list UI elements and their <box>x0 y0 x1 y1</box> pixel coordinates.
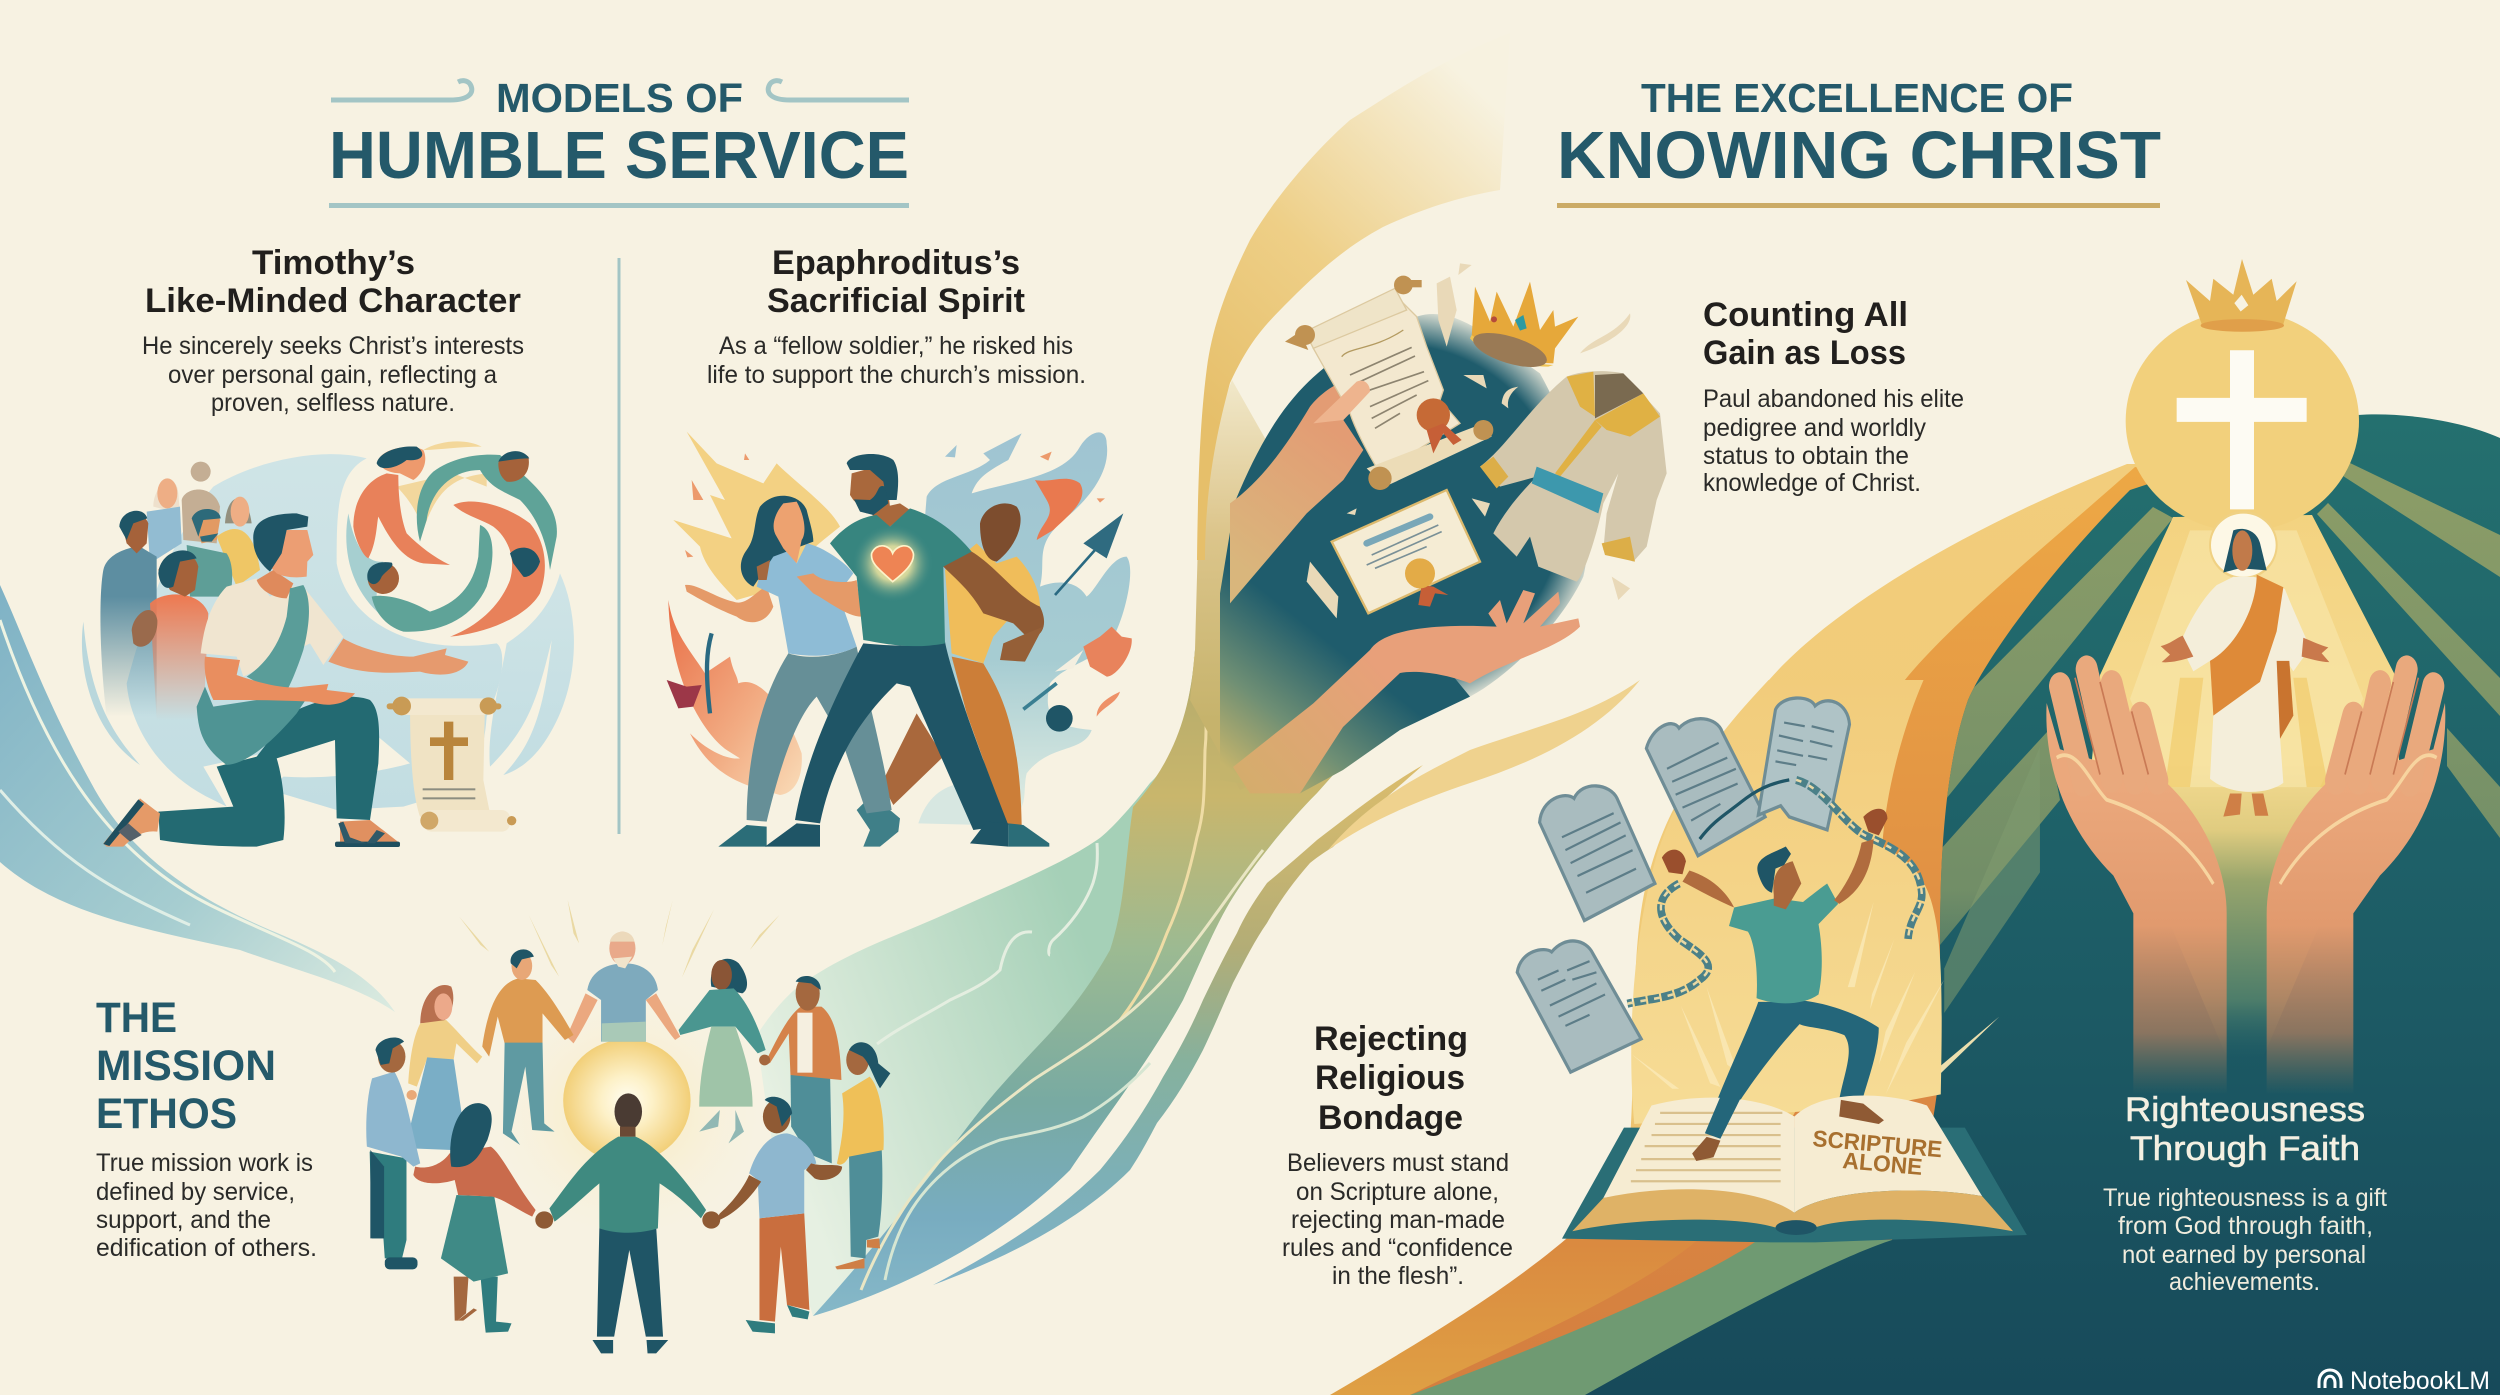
heading: Models of Humble Service: HUMBLE SERVICE <box>329 118 909 193</box>
golden circle <box>2126 311 2359 531</box>
woman in yellow with ponytail <box>835 1042 890 1269</box>
label: Scripture Alone on book <box>1812 1125 1943 1180</box>
right open hand <box>2267 669 2445 1094</box>
man breaking chains <box>1662 809 1887 1139</box>
scroll with seal <box>1285 276 1493 490</box>
panel: righteousness illustration <box>2046 259 2445 1094</box>
text: Rejecting Religious Bondage: rejecting man-made <box>1291 1206 1505 1234</box>
text: Counting All Gain as Loss <box>1703 296 1964 497</box>
crown above circle <box>2186 259 2297 332</box>
central man from back <box>535 1093 720 1353</box>
text: Righteousness Through Faith <box>2103 1091 2387 1296</box>
gold flowing ribbon with beige inner shade <box>1190 33 1640 850</box>
heading: Models of Humble Service <box>329 75 909 208</box>
woman in teal dress <box>679 959 766 1143</box>
panel: counting all gain as loss illustration <box>1220 263 1667 793</box>
text: Rejecting Religious Bondage: Bondage <box>1318 1099 1463 1137</box>
text: Counting All Gain as Loss: knowledge of Christ. <box>1703 469 1921 497</box>
text: Timothy: over personal gain, reflecting a <box>168 361 497 389</box>
panel: Epaphroditus illustration <box>667 432 1132 847</box>
man in blue, left <box>366 1038 420 1269</box>
open receiving hand <box>1233 590 1580 793</box>
text: The Mission Ethos: True mission work is <box>96 1149 313 1177</box>
stone tablets <box>1517 698 1850 1072</box>
flames and debris background <box>667 432 1132 825</box>
text: Epaphroditus: As a “fellow soldier,” he risked his <box>719 332 1073 360</box>
open book <box>1562 1031 2027 1242</box>
man in orange jacket <box>759 976 841 1163</box>
heading: The Excellence of Knowing Christ <box>1557 75 2161 208</box>
text: The Mission Ethos: edification of others. <box>96 1234 317 1262</box>
kneeling man <box>103 513 468 847</box>
text: Timothy: Like-Minded Character <box>145 282 521 320</box>
panel: mission circle illustration <box>366 900 890 1353</box>
text: Counting All Gain as Loss: Counting All <box>1703 296 1908 334</box>
broken chains <box>1627 780 1922 1004</box>
streaks on teal field <box>1913 747 2040 1089</box>
man in orange sweater <box>482 949 574 1145</box>
heading: Models of Humble Service: MODELS OF <box>496 75 743 121</box>
text: Epaphroditus: Sacrificial Spirit <box>767 282 1025 320</box>
text: The Mission Ethos: MISSION <box>96 1042 276 1090</box>
left blue flowing ribbon <box>0 585 395 1012</box>
text: Righteousness Through Faith: achievements. <box>2169 1268 2320 1296</box>
torn robe <box>1480 371 1667 582</box>
certificate <box>1332 490 1480 613</box>
man with yellow shirt, back <box>882 503 1049 847</box>
label: Scripture Alone on book: ALONE <box>1842 1147 1924 1180</box>
text: Timothy: He sincerely seeks Christ’s interests <box>142 332 524 360</box>
elder in blue <box>567 932 680 1043</box>
text: The Mission Ethos <box>96 994 317 1262</box>
text: Righteousness Through Faith: Through Faith <box>2130 1130 2360 1168</box>
left open hand <box>2046 669 2227 1094</box>
text: Timothy <box>142 244 524 417</box>
radiating light lines <box>459 900 779 977</box>
text: Rejecting Religious Bondage <box>1282 1020 1513 1290</box>
text: The Mission Ethos: ETHOS <box>96 1090 237 1138</box>
right side gold wave <box>1330 464 2500 1395</box>
pale light glow behind figure <box>1631 680 1942 1124</box>
text: Timothy: proven, selfless nature. <box>211 389 455 417</box>
hand holding scroll <box>1230 380 1369 603</box>
swirl backdrop <box>82 454 574 810</box>
text: Counting All Gain as Loss: Paul abandoned his elite <box>1703 385 1964 413</box>
panel: rejecting bondage illustration <box>1517 680 2040 1242</box>
gold crown <box>1469 282 1578 374</box>
text: Righteousness Through Faith: not earned by personal <box>2122 1241 2366 1269</box>
central glowing sun <box>482 980 772 1247</box>
text: The Mission Ethos: support, and the <box>96 1206 271 1234</box>
heading: The Excellence of Knowing Christ: THE EXCELLENCE OF <box>1641 75 2073 121</box>
spiral of four people <box>346 441 557 637</box>
pale rays inside glow <box>2130 530 2363 787</box>
divider between columns <box>618 258 620 834</box>
label: Scripture Alone on book: SCRIPTURE <box>1812 1125 1943 1162</box>
text: Rejecting Religious Bondage: rules and “confidence <box>1282 1234 1513 1262</box>
centre green and blue flowing ribbon <box>757 650 1423 1316</box>
text: Righteousness Through Faith: True righteousness is a gift <box>2103 1184 2387 1212</box>
white cross <box>2177 350 2307 509</box>
text: Righteousness Through Faith: from God through faith, <box>2118 1212 2373 1240</box>
panel: Timothy illustration <box>82 441 574 847</box>
text: Epaphroditus: life to support the church’s mission. <box>707 361 1086 389</box>
text: Rejecting Religious Bondage: in the flesh”. <box>1332 1262 1464 1290</box>
dark teal backdrop <box>1220 314 1588 793</box>
heading: The Excellence of Knowing Christ: KNOWING CHRIST <box>1557 118 2161 193</box>
central man with glowing heart <box>765 454 1044 847</box>
text: Epaphroditus: Epaphroditus’s <box>772 244 1020 282</box>
text: The Mission Ethos: defined by service, <box>96 1178 295 1206</box>
NotebookLM watermark: NotebookLM <box>2350 1367 2490 1395</box>
text: Timothy: Timothy’s <box>252 244 415 282</box>
halo <box>2210 512 2277 578</box>
text: Rejecting Religious Bondage: Religious <box>1315 1059 1465 1097</box>
text: Counting All Gain as Loss: Gain as Loss <box>1703 334 1906 372</box>
background people in crowd <box>100 462 260 720</box>
text: Counting All Gain as Loss: status to obtain the <box>1703 442 1909 470</box>
rays of light behind figure <box>1631 902 1944 1094</box>
scroll with cross <box>387 697 516 832</box>
text: Counting All Gain as Loss: pedigree and worldly <box>1703 414 1926 442</box>
right side dark teal field with rays <box>1585 414 2500 1395</box>
woman in yellow top and blue skirt <box>408 985 482 1150</box>
text: Epaphroditus <box>707 244 1086 389</box>
text: The Mission Ethos: THE <box>96 994 177 1042</box>
woman in blue <box>685 496 900 847</box>
text: Rejecting Religious Bondage: on Scripture alone, <box>1296 1178 1499 1206</box>
man in blue top and orange trousers <box>715 1097 842 1333</box>
Jesus figure <box>2161 529 2329 817</box>
right side orange wave <box>1410 467 2500 1395</box>
text: Rejecting Religious Bondage: Believers must stand <box>1287 1149 1509 1177</box>
text: Rejecting Religious Bondage: Rejecting <box>1314 1020 1468 1058</box>
woman in orange from back <box>413 1103 536 1333</box>
text: Righteousness Through Faith: Righteousness <box>2125 1091 2365 1129</box>
lower olive band <box>1410 1240 1892 1395</box>
scraps falling <box>1307 263 1630 618</box>
